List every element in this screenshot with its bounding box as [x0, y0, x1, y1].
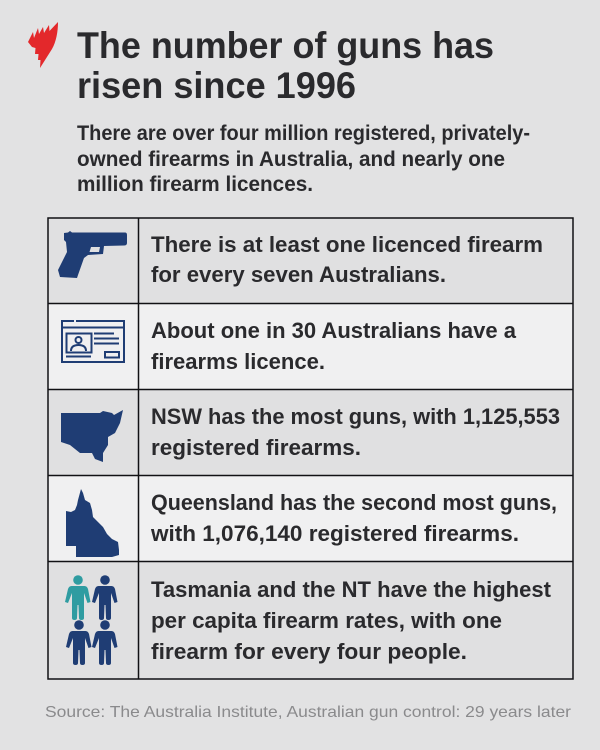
row 1 text: There is at least one licenced firearm	[151, 232, 543, 257]
row 4 text: Queensland has the second most guns,	[151, 490, 557, 515]
row 3 text	[151, 404, 560, 460]
person: navy bottom left	[66, 620, 92, 665]
title: The number of guns has	[77, 25, 494, 66]
icon: NSW map	[61, 410, 123, 462]
row backgrounds	[48, 217, 573, 679]
person: navy top right	[92, 575, 118, 620]
row 2 text: firearms licence.	[151, 349, 325, 374]
icon: four people	[65, 575, 118, 665]
row 4 text	[150, 490, 557, 546]
icon: handgun	[58, 231, 127, 278]
person: teal	[65, 575, 90, 620]
icon: Queensland map	[66, 489, 119, 557]
row 1 text: for every seven Australians.	[151, 262, 446, 287]
subtitle text	[77, 122, 530, 196]
row 3 text: registered firearms.	[151, 435, 361, 460]
row 5 text: firearm for every four people.	[151, 639, 467, 664]
icon: red logo	[28, 22, 58, 68]
row 5 text: Tasmania and the NT have the highest	[151, 577, 552, 602]
title: risen since 1996	[77, 65, 356, 106]
panel: facts table	[48, 217, 573, 679]
table grid lines	[48, 218, 573, 679]
row 4 text: with 1,076,140 registered firearms.	[150, 521, 519, 546]
subtitle text: owned firearms in Australia, and nearly one	[77, 148, 505, 171]
source line: Source: The Australia Institute, Australian gun control: 29 years later	[45, 704, 572, 721]
row 5 text: per capita firearm rates, with one	[151, 608, 502, 633]
row 3 text: NSW has the most guns, with 1,125,553	[151, 404, 560, 429]
person: navy bottom right	[92, 620, 118, 665]
row 1 text	[151, 232, 543, 287]
subtitle text: There are over four million registered, privately-	[77, 122, 530, 145]
row 2 text	[151, 318, 517, 374]
row 5 text	[151, 577, 552, 664]
title	[77, 25, 494, 106]
subtitle text: million firearm licences.	[77, 173, 313, 196]
icon: licence card	[62, 321, 124, 362]
row 2 text: About one in 30 Australians have a	[151, 318, 517, 343]
